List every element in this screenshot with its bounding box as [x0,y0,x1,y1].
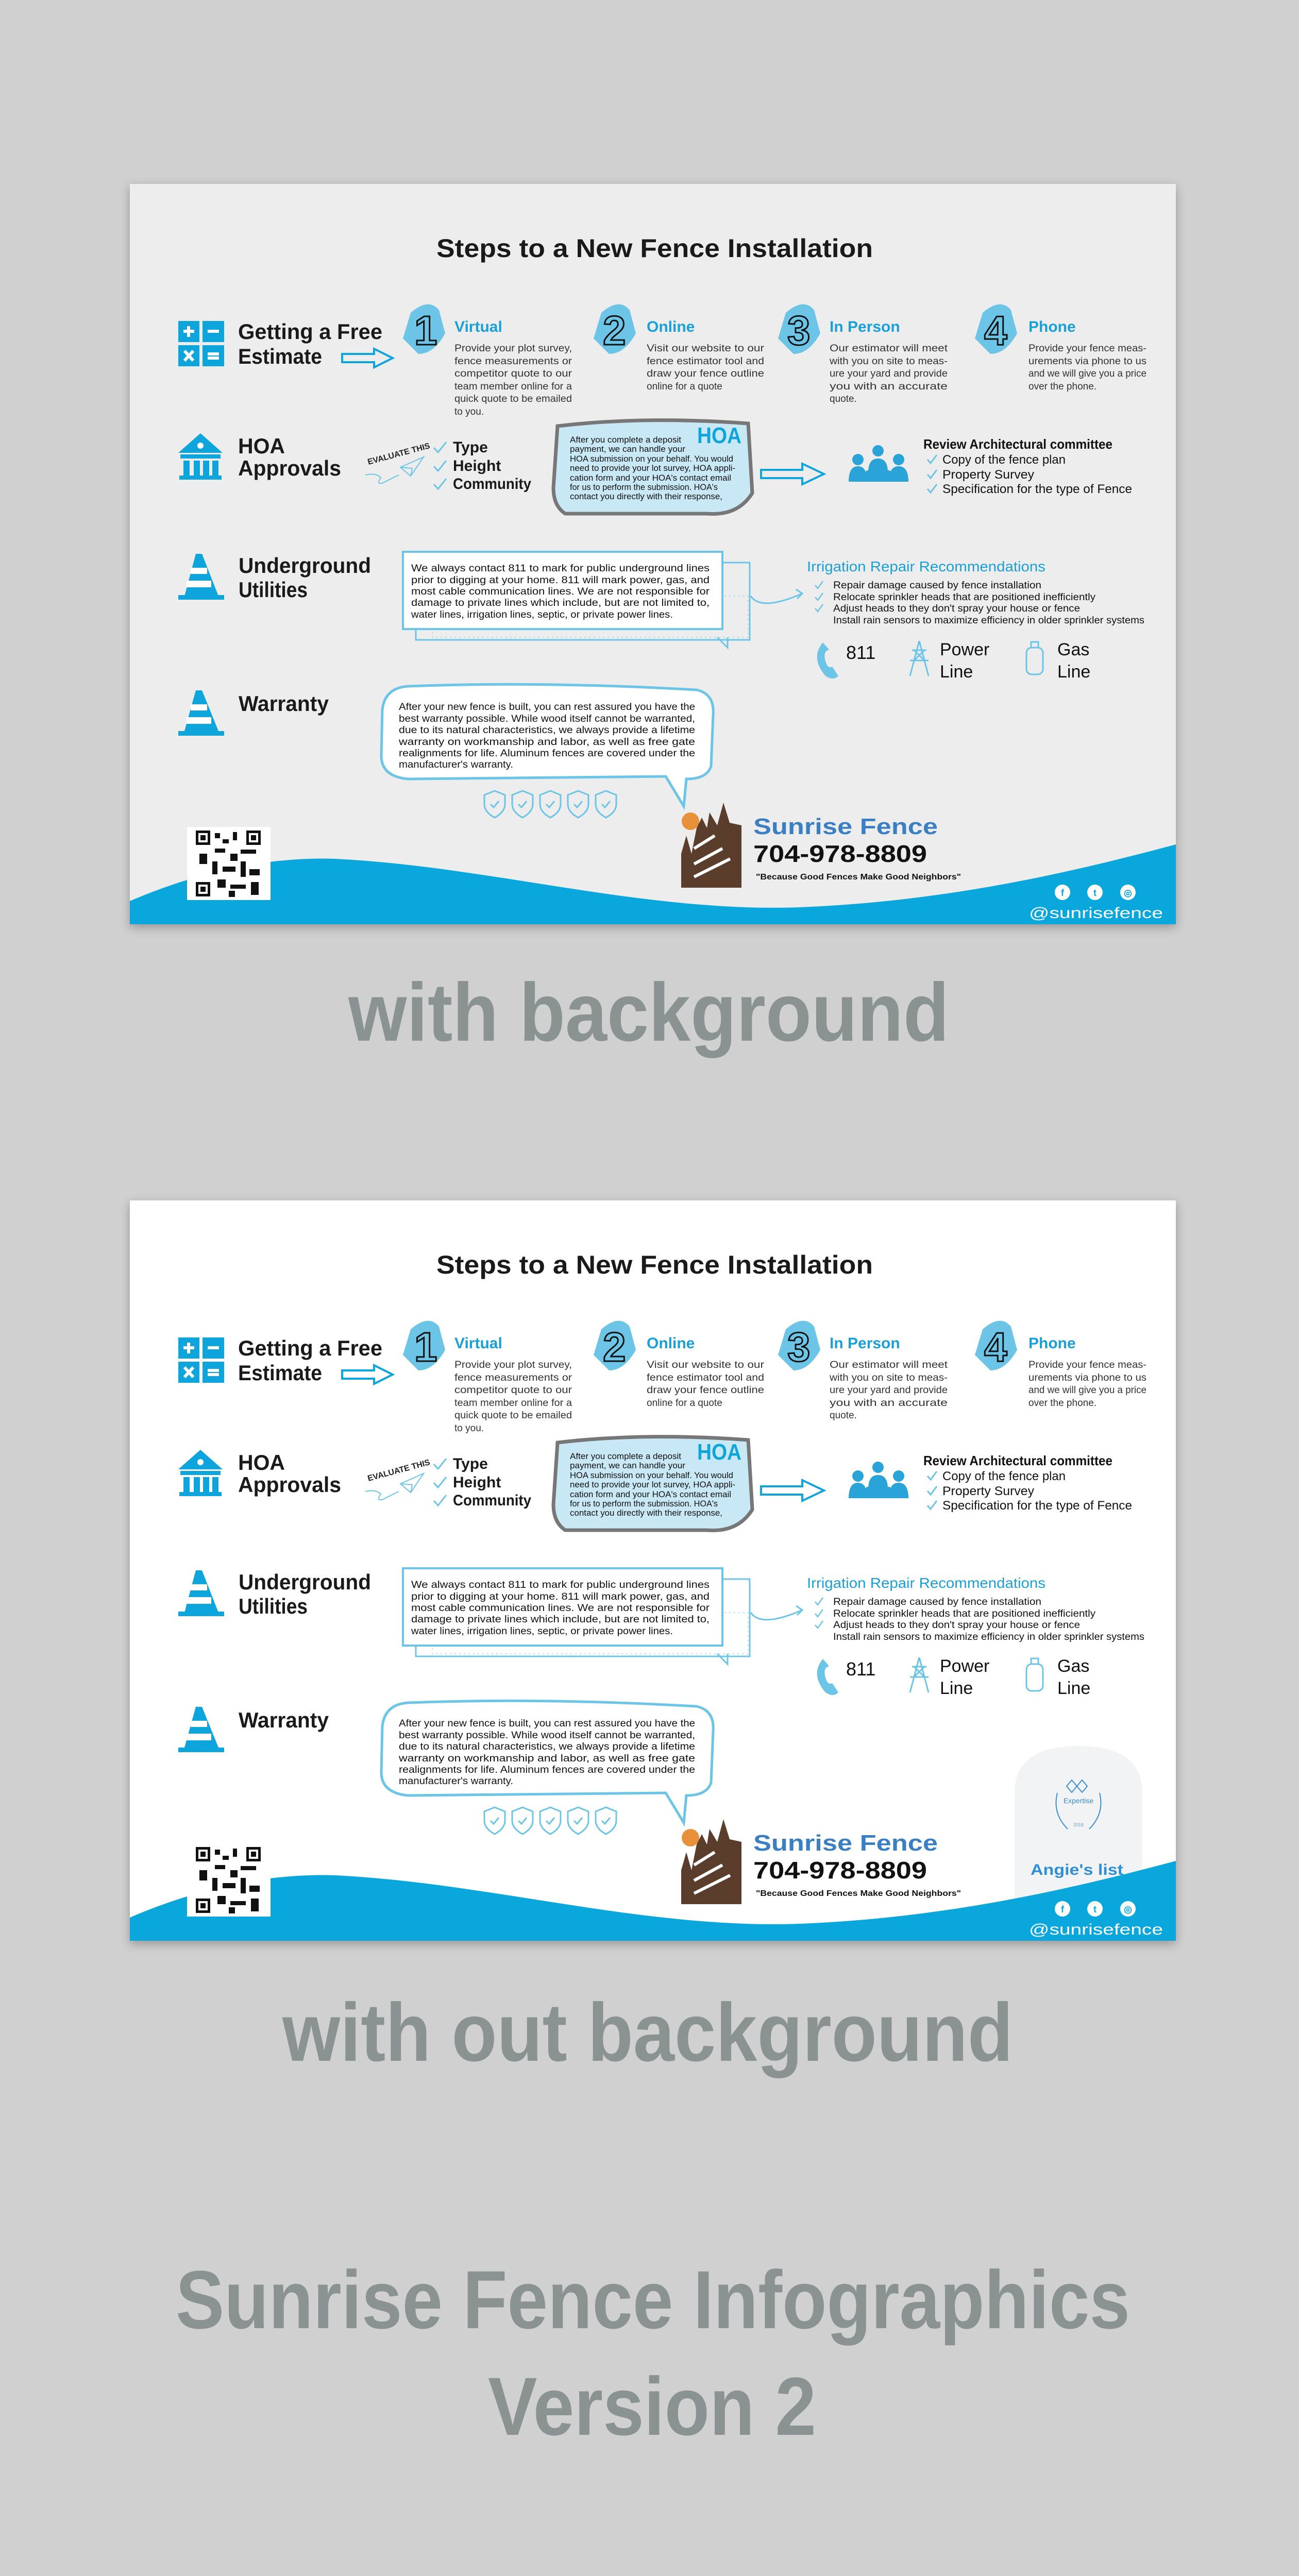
step 2 online: draw your fence outline [647,368,764,379]
review architectural committee list: Copy of the fence plan [942,1469,1066,1483]
callout: HOA submission: payment, we can handle your [570,1461,685,1470]
callout: 811 text box: water lines, irrigation lines, septic, or private power lines. [411,1626,673,1637]
callout: HOA submission: HOA submission on your behalf. You would [570,454,733,464]
callout: 811 text box: most cable communication lines. We are not responsible for [411,1603,710,1614]
step 3 in person: In Person [830,1335,900,1352]
step 4 phone: and we will give you a price [1028,368,1146,379]
heading: warranty: Warranty [239,1708,329,1732]
step 3 in person: quote. [830,1410,857,1421]
heading: underground utilities: Utilities [239,1594,308,1618]
callout: HOA submission: HOA [697,1439,741,1465]
card: without background [130,1200,1176,1941]
callout: HOA submission: cation form and your HOA's contact email [570,473,731,483]
step 2 online: fence estimator tool and [647,1372,764,1383]
logo: sunrise fence: Sunrise Fence [753,1831,938,1856]
irrigation repair recommendations: Install rain sensors to maximize efficiency in older sprinkler systems [833,1632,1144,1642]
social icons and handle: t [1093,888,1096,898]
callout: 811 text box: We always contact 811 to mark for public underground lines [411,1580,710,1590]
heading: getting a free estimate: Estimate [238,1361,322,1385]
heading: getting a free estimate: Getting a Free [238,1336,382,1360]
icon: cone underground [178,554,224,600]
callout: warranty speech bubble: manufacturer's warranty. [399,1776,513,1787]
review architectural committee list: Review Architectural committee [923,436,1112,452]
callout: HOA submission: payment, we can handle your [570,444,685,454]
review architectural committee list: Specification for the type of Fence [942,482,1132,496]
social icons and handle: ◎ [1124,888,1132,898]
checklist: type height community [434,1455,531,1509]
icons row: 811 power gas: 811 [846,642,875,663]
step 1 virtual: Provide your plot survey, [454,1360,572,1370]
callout: 811 text box: most cable communication lines. We are not responsible for [411,586,710,597]
social icons and handle: f [1061,1904,1065,1914]
icons row: 811 power gas: 811 [846,1658,875,1680]
heading: underground utilities: Underground [239,553,371,578]
step 3 in person: quote. [830,394,857,404]
heading: underground utilities: Utilities [239,578,308,602]
callout: HOA submission: for us to perform the submission. HOA's [570,1499,718,1509]
logo: sunrise fence [681,803,961,888]
heading: getting a free estimate [238,319,382,368]
social icons and handle: t [1093,1904,1096,1914]
callout: HOA submission: contact you directly with their response, [570,1508,722,1518]
callout: HOA submission: contact you directly with their response, [570,492,722,501]
title: Steps to a New Fence Installation [436,234,873,263]
step 2 online [594,304,765,392]
irrigation repair recommendations: Irrigation Repair Recommendations [807,558,1045,574]
heading: underground utilities [239,1570,371,1618]
callout: HOA submission: HOA submission on your behalf. You would [570,1470,733,1480]
heading: underground utilities: Underground [239,1570,371,1594]
heading: HOA approvals: Approvals [238,1472,341,1497]
heading: getting a free estimate: Estimate [238,344,322,368]
checklist: type height community: Height [453,457,501,474]
icons: shields [484,791,616,818]
checklist: type height community: Height [453,1474,501,1491]
step 2 online: Visit our website to our [647,343,765,354]
QR code [187,1843,271,1917]
step 3 in person: you with an accurate [830,1398,948,1409]
callout: warranty speech bubble: due to its natural characteristics, we always provide a lifetime [399,725,695,736]
callout: warranty speech bubble: manufacturer's warranty. [399,759,513,770]
step 4 phone: Phone [1028,318,1076,335]
callout: warranty speech bubble: warranty on workmanship and labor, as well as free gate [398,1753,695,1764]
irrigation repair recommendations: Relocate sprinkler heads that are positioned inefficiently [833,592,1096,603]
evaluate this paper plane: EVALUATE THIS [367,1458,431,1483]
step 2 online: fence estimator tool and [647,356,764,367]
step 3 in person: Our estimator will meet [830,343,948,354]
icon: calculator [178,321,224,366]
review architectural committee list: Copy of the fence plan [942,453,1066,467]
logo: sunrise fence: "Because Good Fences Make Good Neighbors" [756,873,961,882]
irrigation repair recommendations: Adjust heads to they don't spray your house or fence [833,1620,1080,1631]
checklist: type height community: Type [453,439,488,456]
icons row: 811 power gas: Line [940,662,973,682]
irrigation repair recommendations [807,1575,1144,1642]
arrow [342,349,393,367]
heading: getting a free estimate: Getting a Free [238,319,382,344]
angies list badge panel: Angie's list [1031,1861,1123,1878]
icon: building [178,433,223,480]
step 3 in person: with you on site to meas- [829,1372,948,1383]
step 3 in person: 3 [787,1324,810,1370]
step 2 online: 2 [603,1324,626,1370]
step 3 in person: In Person [830,318,900,335]
logo: sunrise fence [681,1819,961,1904]
arrow [761,1480,824,1501]
logo: sunrise fence: Sunrise Fence [753,814,938,839]
step 3 in person [778,304,948,404]
step 2 online: Visit our website to our [647,1360,765,1370]
social icons and handle: ◎ [1124,1904,1132,1914]
step 1 virtual [403,1321,572,1434]
step 3 in person: Our estimator will meet [830,1360,948,1370]
step 1 virtual: to you. [454,1423,484,1434]
arrow [342,1365,393,1384]
step 4 phone: 4 [984,308,1007,353]
step 1 virtual: team member online for a [454,1398,572,1409]
step 1 virtual: to you. [454,406,484,417]
step 4 phone [975,1321,1146,1409]
callout: 811 text box [403,1568,750,1664]
step 1 virtual: team member online for a [454,381,572,392]
callout: HOA submission: cation form and your HOA's contact email [570,1489,731,1499]
step 4 phone: Phone [1028,1335,1076,1352]
step 1 virtual: competitor quote to our [454,368,572,379]
step 1 virtual: fence measurements or [454,1372,572,1383]
title: Steps to a New Fence Installation [436,1250,873,1279]
QR code [187,827,271,900]
step 2 online: Online [647,318,695,335]
callout: 811 text box: We always contact 811 to mark for public underground lines [411,563,710,574]
logo: sunrise fence: 704-978-8809 [753,1857,927,1884]
card: with background [130,184,1176,924]
angies list badge panel [1015,1746,1142,1941]
caption: with background: with background [348,966,949,1058]
callout: HOA submission: After you complete a deposit [570,435,681,445]
icons row: 811 power gas: Gas [1057,640,1089,659]
review architectural committee list [923,1453,1132,1513]
step 3 in person: you with an accurate [830,381,948,392]
social icons and handle: @sunrisefence [1029,905,1163,922]
callout: warranty speech bubble: due to its natural characteristics, we always provide a lifetime [399,1741,695,1752]
step 1 virtual: fence measurements or [454,356,572,367]
step 1 virtual [403,304,572,417]
icon: meeting people [849,1462,908,1498]
step 2 online [594,1321,765,1409]
icon: cone underground [178,1570,224,1616]
caption: title footer: Sunrise Fence Infographics [176,2253,1130,2346]
step 1 virtual: Virtual [454,1335,502,1352]
icons row: 811 power gas: Gas [1057,1656,1089,1676]
review architectural committee list: Property Survey [942,468,1034,482]
step 2 online: Online [647,1335,695,1352]
evaluate this paper plane [365,442,431,483]
step 2 online: draw your fence outline [647,1385,764,1396]
callout: warranty speech bubble: warranty on workmanship and labor, as well as free gate [398,737,695,748]
callout: 811 text box: damage to private lines which include, but are not limited to, [411,1614,710,1625]
checklist: type height community: Type [453,1455,488,1472]
checklist: type height community: Community [453,476,531,493]
evaluate this paper plane: EVALUATE THIS [367,442,431,467]
step 1 virtual: competitor quote to our [454,1385,572,1396]
callout: 811 text box: prior to digging at your home. 811 will mark power, gas, and [411,575,710,586]
checklist: type height community [434,439,531,493]
step 4 phone: 4 [984,1324,1007,1370]
social icons and handle [1029,885,1163,922]
step 1 virtual: quick quote to be emailed [454,1410,572,1421]
callout: warranty speech bubble: realignments for life. Aluminum fences are covered under the [399,1765,695,1775]
irrigation repair recommendations: Repair damage caused by fence installation [833,1597,1041,1607]
heading: HOA approvals: Approvals [238,456,341,480]
callout: warranty speech bubble: best warranty possible. While wood itself cannot be warranted, [399,714,695,724]
logo: sunrise fence: "Because Good Fences Make Good Neighbors" [756,1889,961,1898]
review architectural committee list: Property Survey [942,1484,1034,1498]
angies list badge panel: 2018 [1073,1822,1084,1827]
review architectural committee list [923,436,1132,496]
callout: warranty speech bubble [381,684,713,806]
heading: HOA approvals [238,1450,341,1497]
step 4 phone [975,304,1146,392]
step 4 phone: Provide your fence meas- [1028,1360,1146,1370]
heading: warranty: Warranty [239,691,329,716]
arrow: curved [751,589,802,603]
callout: 811 text box: damage to private lines which include, but are not limited to, [411,598,710,608]
step 2 online: online for a quote [647,1398,722,1409]
wave footer [130,1861,1176,1941]
step 2 online: online for a quote [647,381,722,392]
callout: HOA submission: need to provide your lot survey, HOA appli- [570,463,735,473]
icons row: 811 power gas: Power [940,1656,989,1676]
icons: shields [484,1807,616,1834]
step 1 virtual: 1 [414,1324,437,1370]
callout: HOA submission: need to provide your lot survey, HOA appli- [570,1480,735,1489]
step 3 in person: ure your yard and provide [830,368,948,379]
callout: warranty speech bubble: After your new fence is built, you can rest assured you have the [399,702,695,713]
step 1 virtual: quick quote to be emailed [454,394,572,404]
step 1 virtual: Virtual [454,318,502,335]
icon: calculator [178,1337,224,1383]
irrigation repair recommendations: Repair damage caused by fence installation [833,580,1041,591]
angies list badge panel: Expertise [1064,1797,1093,1805]
checklist: type height community: Community [453,1492,531,1509]
heading: HOA approvals: HOA [238,1450,285,1475]
heading: underground utilities [239,553,371,602]
arrow: curved [751,1606,802,1620]
icon: cone warranty [178,690,224,736]
irrigation repair recommendations: Irrigation Repair Recommendations [807,1575,1045,1591]
step 2 online: 2 [603,308,626,353]
step 4 phone: over the phone. [1028,381,1096,392]
caption: with out background: with out background [282,1986,1013,2078]
review architectural committee list: Specification for the type of Fence [942,1499,1132,1513]
irrigation repair recommendations: Relocate sprinkler heads that are positioned inefficiently [833,1608,1096,1619]
social icons and handle: f [1061,888,1065,898]
logo: sunrise fence: 704-978-8809 [753,840,927,867]
step 3 in person [778,1321,948,1421]
social icons and handle: @sunrisefence [1029,1921,1163,1938]
callout: HOA submission: After you complete a deposit [570,1451,681,1461]
callout: HOA submission [553,420,752,514]
irrigation repair recommendations: Install rain sensors to maximize efficiency in older sprinkler systems [833,615,1144,626]
callout: HOA submission [553,1437,752,1530]
callout: HOA submission: for us to perform the submission. HOA's [570,482,718,492]
callout: warranty speech bubble: best warranty possible. While wood itself cannot be warranted, [399,1730,695,1741]
icon: cone warranty [178,1707,224,1752]
step 3 in person: with you on site to meas- [829,356,948,367]
heading: HOA approvals [238,434,341,480]
step 1 virtual: Provide your plot survey, [454,343,572,354]
step 4 phone: and we will give you a price [1028,1385,1146,1396]
irrigation repair recommendations [807,558,1144,626]
icon: meeting people [849,445,908,482]
arrow [761,464,824,484]
icons row: 811 power gas [817,1656,1090,1698]
icon: building [178,1450,223,1496]
callout: warranty speech bubble [381,1701,713,1823]
callout: 811 text box: prior to digging at your home. 811 will mark power, gas, and [411,1591,710,1602]
icons row: 811 power gas: Power [940,640,989,659]
callout: 811 text box [403,552,750,648]
icons row: 811 power gas [817,640,1090,682]
callout: HOA submission: HOA [697,423,741,448]
step 1 virtual: 1 [414,308,437,353]
step 3 in person: 3 [787,308,810,353]
step 3 in person: ure your yard and provide [830,1385,948,1396]
callout: 811 text box: water lines, irrigation lines, septic, or private power lines. [411,609,673,620]
step 4 phone: over the phone. [1028,1398,1096,1409]
wave footer [130,844,1176,924]
evaluate this paper plane [365,1458,431,1500]
caption: title footer: Version 2 [488,2360,816,2452]
icons row: 811 power gas: Line [940,1679,973,1698]
social icons and handle [1029,1901,1163,1938]
callout: warranty speech bubble: realignments for life. Aluminum fences are covered under the [399,748,695,759]
heading: getting a free estimate [238,1336,382,1385]
step 4 phone: urements via phone to us [1028,1372,1146,1383]
icons row: 811 power gas: Line [1057,662,1090,682]
icons row: 811 power gas: Line [1057,1679,1090,1698]
callout: warranty speech bubble: After your new fence is built, you can rest assured you have the [399,1718,695,1729]
review architectural committee list: Review Architectural committee [923,1453,1112,1468]
irrigation repair recommendations: Adjust heads to they don't spray your house or fence [833,603,1080,614]
step 4 phone: urements via phone to us [1028,356,1146,367]
heading: HOA approvals: HOA [238,434,285,458]
step 4 phone: Provide your fence meas- [1028,343,1146,354]
